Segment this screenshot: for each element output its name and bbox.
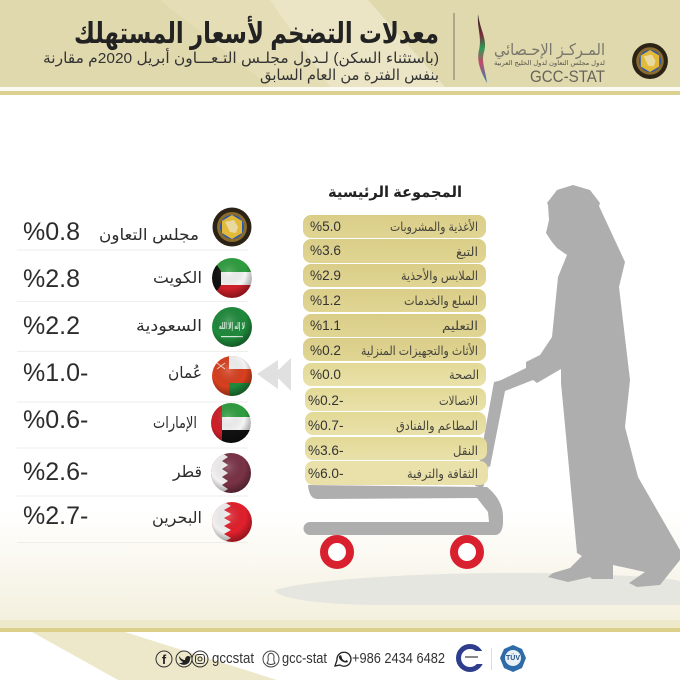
row: Kuwait xyxy=(17,258,252,302)
row: Kuwait: الكويت xyxy=(153,270,202,288)
row: goods and services xyxy=(303,289,486,312)
row: education xyxy=(303,314,486,337)
row: GCC xyxy=(17,208,252,250)
row: culture and recreation: %6.0- xyxy=(308,466,344,481)
row: Bahrain: البحرين xyxy=(152,510,202,528)
cart wheel right xyxy=(454,539,480,565)
handle: gcc-stat: gcc-stat xyxy=(282,651,327,667)
panel: country rates xyxy=(17,208,252,543)
row: Kuwait: %2.8 xyxy=(23,265,80,293)
row: UAE: الإمارات xyxy=(153,415,197,433)
row: GCC: %0.8 xyxy=(23,218,80,246)
row: Saudi Arabia xyxy=(17,307,252,352)
row: culture and recreation: الثقافة والترفية xyxy=(407,467,478,482)
row: education: %1.1 xyxy=(310,318,341,333)
arrow: chevrons pointing at Oman xyxy=(257,358,291,391)
subtitle: (باستثناء السكن) لـدول مجلـس التـعـــاون أبريل 2020م مقارنة xyxy=(43,48,439,67)
row: furnishings: %0.2 xyxy=(310,343,341,358)
row: health: %0.0 xyxy=(310,367,341,382)
row: Oman xyxy=(17,356,252,402)
row: clothing: الملابس والأحذية xyxy=(401,268,478,284)
handle: gccstat: gccstat xyxy=(212,651,254,667)
row: transport: %3.6- xyxy=(308,443,344,458)
row: Saudi Arabia: لا إله إلا الله xyxy=(219,321,245,331)
row: communications xyxy=(305,388,486,411)
row: clothing xyxy=(303,264,486,287)
row: UAE xyxy=(17,403,251,448)
heading: main groups: المجموعة الرئيسية xyxy=(328,184,462,201)
row: health: الصحة xyxy=(449,368,479,382)
row: education: التعليم xyxy=(442,319,478,334)
cart handle and frame xyxy=(475,378,512,488)
row: Bahrain: %2.7- xyxy=(23,502,88,530)
certification divider xyxy=(491,648,492,670)
row: furnishings: الأثاث والتجهيزات المنزلية xyxy=(361,343,478,359)
icon: snapchat xyxy=(263,651,279,667)
row: Oman: %1.0- xyxy=(23,359,88,387)
row: goods and services: السلع والخدمات xyxy=(404,294,478,309)
row: communications: %0.2- xyxy=(308,393,344,408)
header divider xyxy=(454,13,455,80)
GCC-STAT logo text xyxy=(494,42,605,86)
GCC-STAT logo text: المـركـز الإحـصائي xyxy=(494,42,605,60)
GCC-STAT logo text: GCC-STAT xyxy=(530,67,605,86)
row: Qatar: %2.6- xyxy=(23,458,88,486)
panel: inflation by group rows xyxy=(303,215,488,485)
social icons and contacts xyxy=(156,645,526,672)
phone number: +986 2434 6482 xyxy=(352,651,445,667)
icon: instagram xyxy=(192,651,208,667)
icon: TUV badge xyxy=(500,645,526,672)
row: Qatar xyxy=(17,453,251,496)
row: tobacco: %3.6 xyxy=(310,243,341,258)
row: restaurants and hotels xyxy=(305,412,486,435)
row: culture and recreation xyxy=(305,461,488,485)
icon: facebook xyxy=(156,651,172,667)
row: transport: النقل xyxy=(453,444,478,458)
row: clothing: %2.9 xyxy=(310,268,341,283)
title: معدلات التضخم لأسعار المستهلك xyxy=(74,15,439,50)
icon: ISO badge xyxy=(458,646,488,670)
ground shadow xyxy=(275,573,680,605)
row: food: الأغذية والمشروبات xyxy=(390,219,478,235)
row: transport xyxy=(305,437,487,460)
subtitle xyxy=(43,48,439,84)
GCC-STAT logo text: لدول مجلس التعاون لدول الخليج العربية xyxy=(494,60,605,67)
icon: whatsapp xyxy=(335,652,351,666)
row: food xyxy=(303,215,486,238)
icon: GCC-STAT ribbon logo xyxy=(478,14,487,83)
row: restaurants and hotels: %0.7- xyxy=(308,418,344,433)
shopping cart xyxy=(304,378,512,565)
row: communications: الاتصالات xyxy=(439,394,478,408)
row: Saudi Arabia: %2.2 xyxy=(23,312,80,340)
row: health xyxy=(303,363,486,386)
row: Oman: عُمان xyxy=(168,364,202,382)
row: Bahrain xyxy=(17,502,252,543)
row: goods and services: %1.2 xyxy=(310,293,341,308)
row: Qatar: قطر xyxy=(172,464,202,482)
row: restaurants and hotels: المطاعم والفنادق xyxy=(396,419,478,434)
icon: twitter xyxy=(176,651,192,667)
row: tobacco xyxy=(303,239,486,263)
row: UAE: %0.6- xyxy=(23,406,88,434)
row: food: %5.0 xyxy=(310,219,341,234)
row: furnishings xyxy=(303,338,486,361)
row: GCC: مجلس التعاون xyxy=(99,227,199,245)
header band xyxy=(0,0,680,95)
subtitle: بنفس الفترة من العام السابق xyxy=(260,67,439,84)
man silhouette xyxy=(483,185,680,587)
cart wheel left xyxy=(324,539,350,565)
icon: TUV badge: TÜV xyxy=(506,653,520,662)
icon: GCC emblem header xyxy=(632,43,668,79)
icon: facebook: f xyxy=(162,652,167,667)
row: Saudi Arabia: السعودية xyxy=(136,318,202,336)
row: tobacco: التبغ xyxy=(456,245,478,259)
footer band xyxy=(0,620,680,680)
